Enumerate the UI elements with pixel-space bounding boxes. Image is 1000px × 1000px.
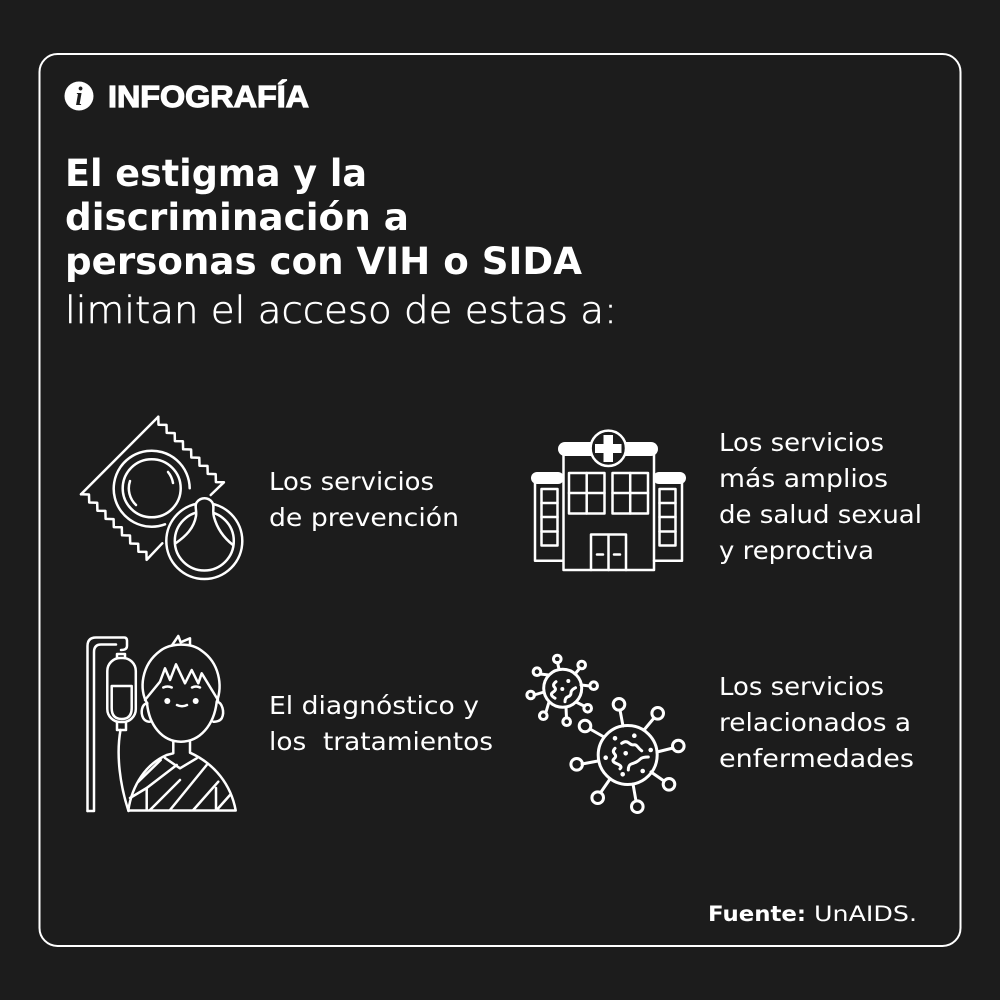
heading: infografía: INFOGRAFÍA [108, 79, 309, 114]
text: diagnóstico: El diagnóstico y [269, 691, 479, 720]
icon: patient with IV drip [88, 636, 236, 811]
source: UnAIDS. [814, 902, 917, 926]
title: El estigma y la [65, 152, 367, 195]
text: enfermedades: Los servicios [719, 672, 884, 701]
title [65, 152, 617, 332]
text: prevención: Los servicios [269, 467, 434, 496]
icon: info [64, 82, 94, 111]
dots: patient eyes [164, 698, 199, 704]
text: salud sexual [719, 428, 922, 565]
icon: condom [81, 417, 242, 579]
text: diagnóstico [269, 691, 493, 756]
title: personas con VIH o SIDA [65, 240, 582, 283]
title: limitan el acceso de estas a: [65, 289, 617, 332]
icon: viruses [527, 655, 684, 812]
text: salud sexual: de salud sexual [719, 500, 922, 529]
icon: hospital [531, 431, 686, 570]
text: enfermedades: enfermedades [719, 744, 914, 773]
text: prevención [269, 467, 459, 532]
source [708, 902, 917, 926]
title: discriminación a [65, 196, 409, 239]
text: salud sexual: más amplios [719, 464, 888, 493]
text: enfermedades: relacionados a [719, 708, 911, 737]
header: infografía label [64, 79, 309, 114]
icon: info: i [75, 82, 83, 111]
text: prevención: de prevención [269, 503, 459, 532]
source: Fuente: [708, 902, 806, 926]
text: salud sexual: Los servicios [719, 428, 884, 457]
text: diagnóstico: los tratamientos [269, 727, 493, 756]
text: enfermedades [719, 672, 914, 773]
text: salud sexual: y reproctiva [719, 536, 874, 565]
